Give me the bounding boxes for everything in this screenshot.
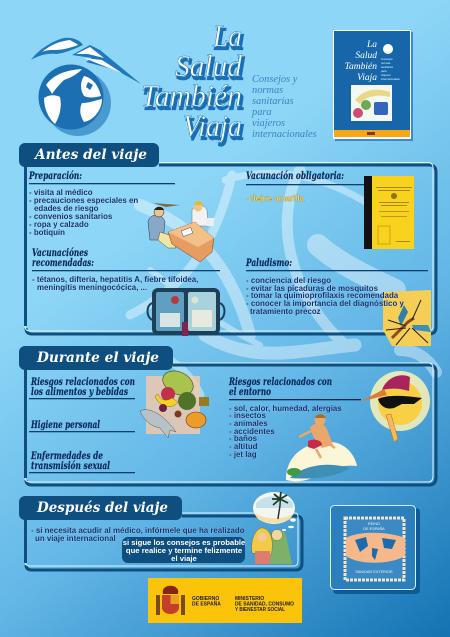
illustration: couple (252, 528, 292, 564)
text: informe al médico (31, 526, 245, 543)
subtitle (251, 74, 317, 140)
block: preparación: - visita al médico (29, 188, 93, 197)
logo: gobierno de españa (148, 578, 302, 623)
callout (122, 537, 246, 563)
illustration: thought bubble with palm (253, 492, 296, 531)
watermark crest (130, 170, 436, 395)
block: paludismo: tratamiento precoz (250, 307, 321, 316)
book cover: sanitarias (381, 65, 394, 69)
section header: después: Después del viaje (36, 500, 168, 516)
block: enfermedades (29, 451, 135, 473)
block: riesgos entorno: - insectos (229, 411, 266, 420)
title: También (141, 78, 242, 113)
illustration: food (140, 366, 209, 438)
book cover: La (366, 40, 377, 50)
block: paludismo: - evitar las picaduras de mosquitos (246, 284, 379, 293)
section header: antes: Antes del viaje (33, 147, 147, 163)
book cover: Viaja (357, 73, 377, 83)
badge: reino de españa world map: DE ESPAÑA (363, 526, 385, 531)
book cover: normas (381, 61, 391, 65)
block: preparación: - botiquín (29, 228, 65, 237)
text: informe al médico: un viaje internacional (35, 534, 116, 543)
logo: gobierno de españa: MINISTERIO (235, 596, 264, 602)
badge: reino de españa world map: REINO (368, 522, 380, 526)
logo: gobierno de españa: DE SANIDAD, CONSUMO (235, 602, 294, 608)
panel: antes del viaje (19, 143, 436, 346)
block: riesgos alimentos (29, 377, 135, 399)
block: preparación: - convenios sanitarios (29, 212, 113, 221)
block: riesgos entorno: el entorno (229, 387, 271, 398)
logo: gobierno de españa: Y BIENESTAR SOCIAL (235, 607, 285, 613)
subtitle: Consejos y (252, 74, 298, 85)
block: preparación: - precauciones especiales en (29, 196, 138, 205)
block: vacunaciones recomendadas (32, 248, 220, 292)
title: Salud (177, 51, 244, 86)
illustration: first aid suitcase (148, 288, 224, 336)
coat of arms (156, 586, 185, 615)
callout: el viaje (171, 554, 198, 563)
block: paludismo: - conocer la importancia del diagnóstico y (246, 299, 404, 308)
section header: antes (19, 143, 159, 167)
block: riesgos entorno: - animales (229, 419, 268, 428)
title: Salud (175, 48, 242, 83)
block: riesgos alimentos: los alimentos y bebidas (31, 387, 128, 398)
text: informe al médico: - si necesita acudir al médico, infórmele que ha realizado (31, 526, 245, 535)
badge: reino de españa world map: SANIDAD EXTERIOR (355, 570, 393, 574)
book cover: internacionales (381, 77, 400, 81)
block: paludismo (245, 258, 428, 316)
block: enfermedades: transmisión sexual (31, 461, 110, 472)
subtitle: para (251, 107, 272, 118)
section header: durante: Durante el viaje (36, 350, 159, 366)
subtitle: normas (252, 85, 283, 96)
section header: después (19, 496, 182, 520)
book cover: viajeros (381, 73, 391, 77)
block: riesgos entorno: - baños (229, 434, 258, 443)
title: También (143, 81, 244, 116)
callout: que realice y termine felizmente (126, 546, 243, 555)
book cover (333, 30, 413, 141)
book cover: También (345, 62, 377, 72)
book cover: Salud (355, 51, 377, 61)
panel: después del viaje (19, 492, 302, 570)
callout: si sigue los consejos es probable (123, 538, 246, 547)
block: vacunación obligatoria (246, 171, 366, 203)
block: vacunaciones recomendadas: Vacunaciónes (32, 248, 88, 259)
title: Viaja (185, 111, 244, 146)
block: paludismo: Paludismo: (245, 258, 292, 269)
illustration: mosquito (383, 290, 431, 346)
panel: durante el viaje (19, 346, 436, 485)
block: riesgos entorno (228, 377, 361, 459)
block: riesgos alimentos: Riesgos relacionados con (30, 377, 135, 388)
block: preparación (28, 171, 175, 237)
block: riesgos entorno: - accidentes (229, 427, 275, 436)
book cover: para (381, 69, 387, 73)
block: preparación: - ropa y calzado (29, 220, 89, 229)
logo: gobierno de españa: DE ESPAÑA (192, 600, 221, 608)
block: enfermedades: Enfermedades de (30, 451, 103, 462)
title: La (214, 21, 244, 56)
block: riesgos entorno: - altitud (229, 442, 258, 451)
title (141, 18, 244, 146)
block: preparación: edades de riesgo (34, 204, 99, 213)
yellow vaccination certificate (364, 176, 414, 249)
illustration: sun with sunglasses (360, 371, 430, 442)
title: La (212, 18, 242, 53)
section header: durante (19, 346, 173, 370)
subtitle: sanitarias (252, 96, 294, 107)
block: paludismo: - conciencia del riesgo (246, 276, 331, 285)
block: vacunación obligatoria: Vacunación obligatoria: (246, 171, 344, 182)
book cover: Consejos (381, 57, 393, 61)
badge: reino de españa world map (330, 506, 420, 594)
subtitle: viajeros (252, 118, 285, 129)
block: vacunaciones recomendadas: meningitis meningocócica, ... (37, 283, 147, 292)
block: higiene personal: Higiene personal (30, 420, 100, 431)
block: riesgos entorno: - sol, calor, humedad, alergias (229, 404, 342, 413)
block: paludismo: - tomar la quimioprofilaxis recomendada (246, 291, 399, 300)
illustration: doctor visit (148, 201, 214, 262)
illustration: surfer on wave (286, 414, 357, 481)
title: Viaja (183, 108, 242, 143)
block: riesgos entorno: Riesgos relacionados con (228, 377, 332, 388)
logo: gobierno de españa: GOBIERNO (192, 596, 219, 602)
block: preparación: Preparación: (28, 171, 82, 182)
block: riesgos entorno: - jet lag (229, 450, 257, 459)
block: vacunaciones recomendadas: - tétanos, difteria, hepatitis A, fiebre tifoidea, (32, 275, 198, 284)
block: vacunación obligatoria: - fiebre amarilla (246, 194, 305, 203)
block: vacunaciones recomendadas: recomendadas: (32, 258, 94, 269)
subtitle: internacionales (252, 129, 317, 140)
logo: globe and plane (31, 38, 141, 136)
